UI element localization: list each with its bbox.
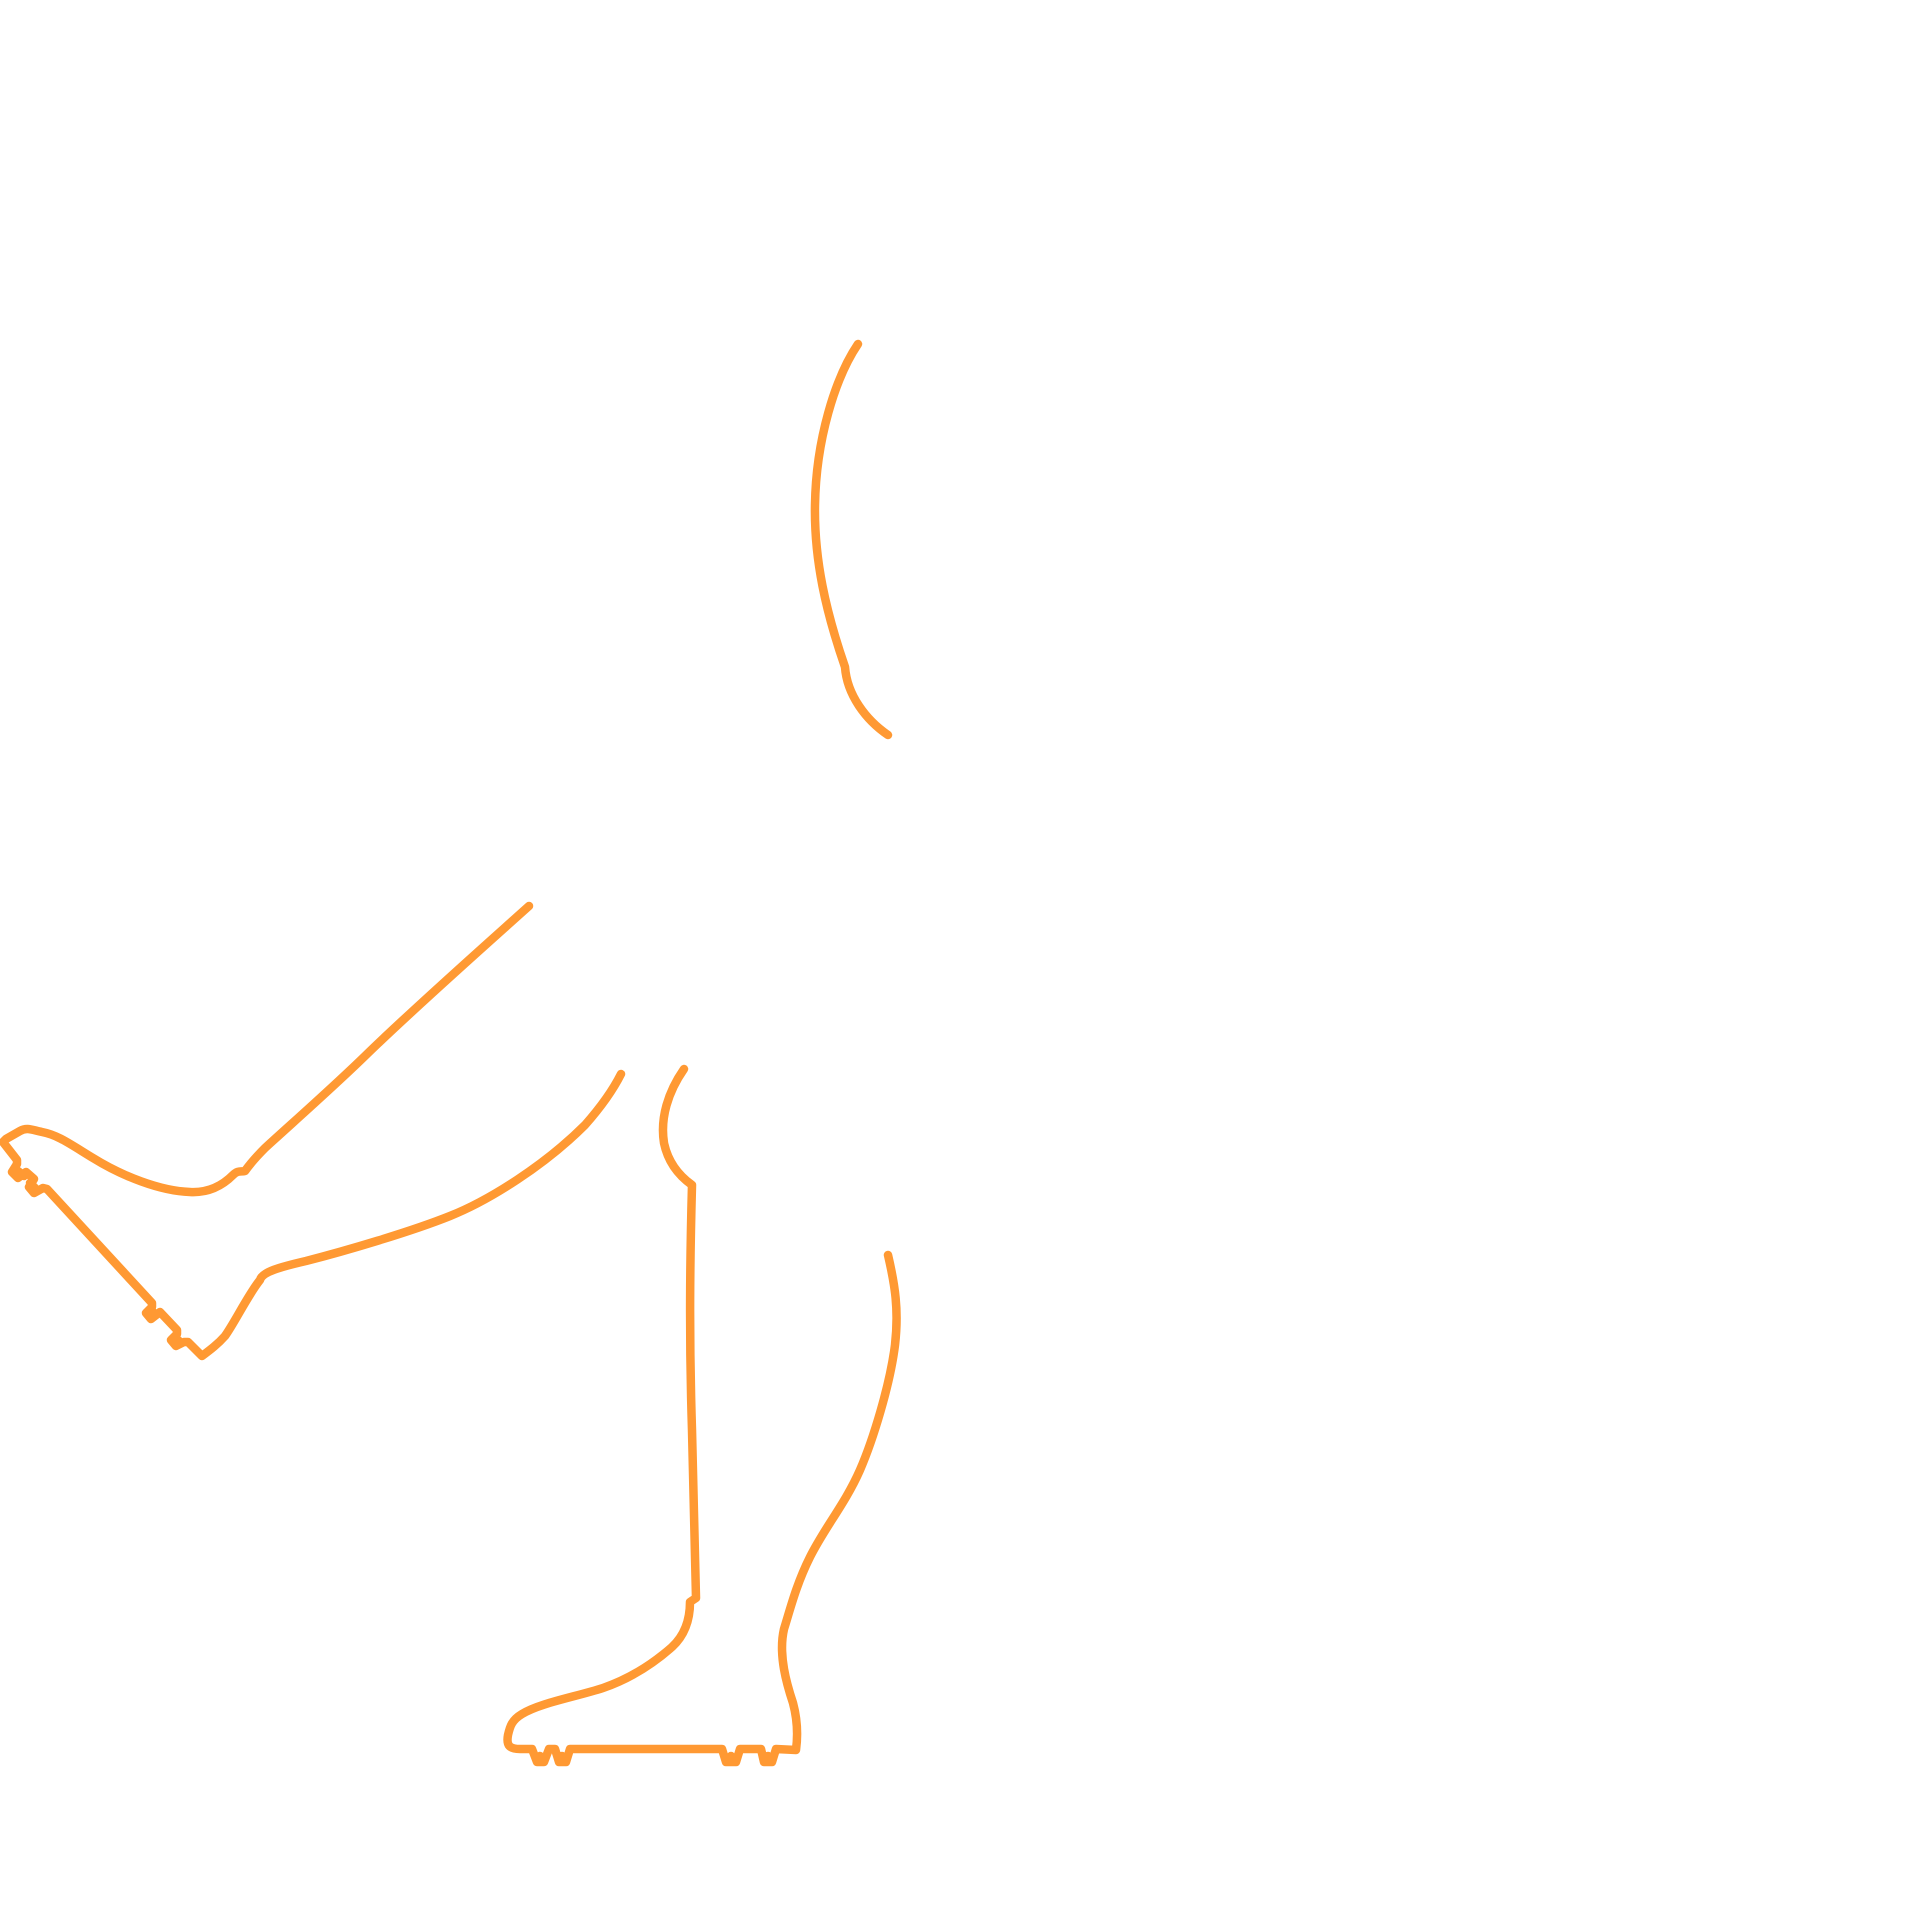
torso curve <box>815 344 888 735</box>
right boot and standing leg <box>508 1069 897 1762</box>
left boot and raised leg <box>3 906 621 1356</box>
